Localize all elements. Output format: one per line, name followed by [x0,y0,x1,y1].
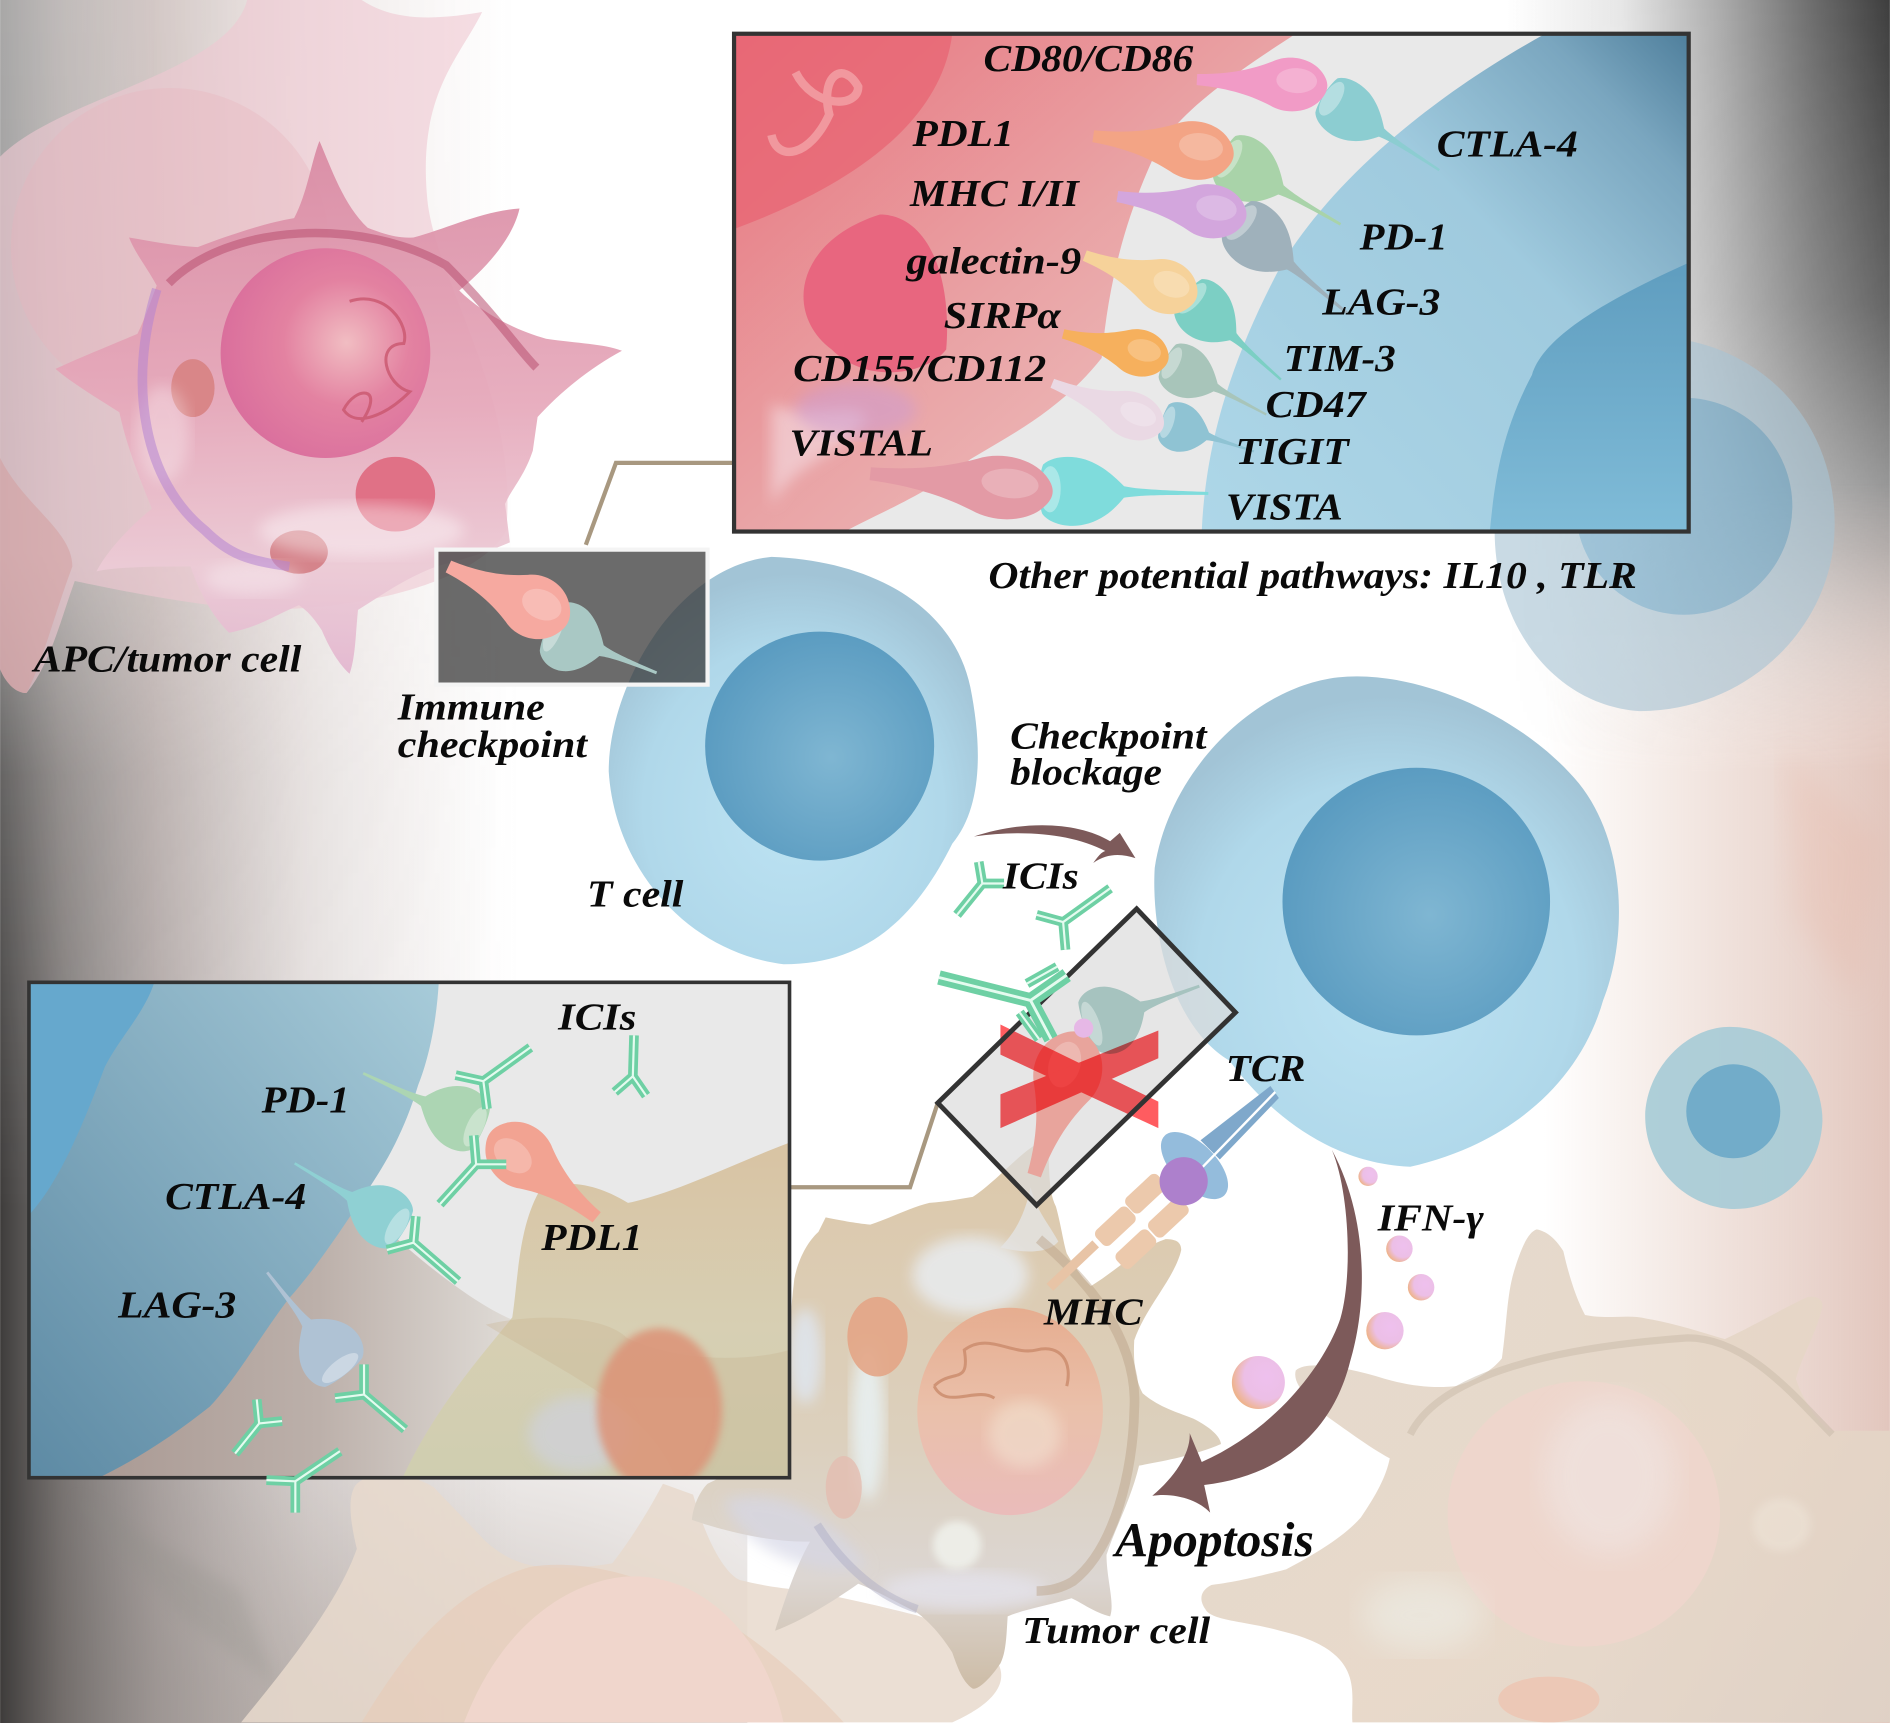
panel labels: VISTA [1226,486,1343,528]
labels: TCR, MHC, IFN, tumor, apoptosis: Apoptosis [1112,1514,1314,1567]
CTLA-4 [1315,78,1440,171]
blocked checkpoint box [938,909,1235,1205]
MHC I/II ligand [1116,184,1246,238]
small T cell, right [1645,1027,1822,1209]
panel labels: TIGIT [1235,431,1350,473]
PDL1 ligand [1092,121,1234,180]
pink APC region [734,34,1296,532]
panel labels [790,38,1578,528]
ligand [1002,1022,1113,1186]
arrow: apoptosis [1152,1150,1362,1513]
PD-1 [1213,135,1342,226]
panel labels: CTLA-4 [1437,124,1578,166]
panel labels: galectin-9 [905,241,1081,283]
CD47 [1158,344,1267,416]
antibodies: main [939,862,1110,1039]
panel labels: CD155/CD112 [793,348,1046,390]
label: ICIs main: ICIs [1002,855,1079,897]
galectin-9 ligand [1083,250,1198,314]
red cross [1000,1025,1158,1128]
labels: TCR, MHC, IFN, tumor, apoptosis: Tumor cell [1022,1610,1210,1652]
panel labels: CD47 [1266,384,1368,426]
main labels: T cell [587,873,684,915]
panel labels: CD80/CD86 [984,38,1194,80]
T cell [609,557,978,964]
panel labels: PDL1 [540,1217,642,1259]
blue cell region [1202,34,1689,532]
VISTAL ligand [870,456,1053,520]
blue cell region [29,982,439,1478]
PD-1 [362,1072,490,1152]
panel labels: ICIs [557,996,636,1038]
CD155/CD112 ligand [1050,379,1164,440]
faded tumor cell, bottom right [1201,1229,1890,1722]
main labels: APC/tumor cell [32,638,302,680]
labels: TCR, MHC, IFN, tumor, apoptosis: TCR [1226,1048,1305,1090]
PDL1 [485,1122,601,1222]
main labels: checkpoint [398,724,588,766]
inset: immune checkpoint [434,548,710,687]
main labels: Immune [397,687,545,729]
faded tumor cell, bottom centre [241,1474,1001,1722]
SIRP ligand [1062,329,1169,377]
panel: blockade by ICIs [29,982,790,1513]
T cell, activated [1154,676,1619,1167]
IFN-gamma particles [1232,1167,1434,1409]
brown background [102,1216,510,1476]
antibodies: panel [235,1035,646,1513]
main labels: blockage [1010,752,1162,794]
TIM-3 [1174,279,1282,380]
tumor cell [692,1139,1221,1689]
main labels: Checkpoint [1010,716,1208,758]
panel labels: VISTAL [790,423,933,465]
faded T cell, top right [1495,337,1835,711]
labels: TCR, MHC, IFN, tumor, apoptosis [1022,1048,1485,1652]
labels: TCR, MHC, IFN, tumor, apoptosis: MHC [1043,1292,1144,1334]
connector lines [586,463,938,1187]
panel labels: PD-1 [1359,217,1448,259]
panel labels: PD-1 [261,1080,350,1122]
CTLA-4 [279,1137,420,1255]
panel labels: PDL1 [911,113,1014,155]
panel: checkpoint pairs [734,34,1689,532]
panel labels: MHC I/II [909,173,1081,215]
panel labels: TIM-3 [1284,338,1396,380]
panel labels: CTLA-4 [165,1176,306,1218]
other pathways note: Other potential pathways: IL10 , TLR [988,555,1637,597]
LAG-3 [1222,201,1348,314]
APC / tumor cell [55,141,622,674]
TIGIT [1158,402,1254,452]
faded outer membrane of APC [0,0,508,693]
TCR / MHC complex [1050,1086,1279,1287]
LAG-3 [241,1252,373,1394]
panel labels: LAG-3 [1321,282,1440,324]
CD80/CD86 [1196,58,1328,112]
panel labels: SIRPα [944,295,1061,337]
labels: TCR, MHC, IFN, tumor, apoptosis: IFN-γ [1377,1198,1485,1240]
receptor [1073,954,1211,1060]
panel labels: LAG-3 [117,1284,236,1326]
tan tumor region [403,1143,790,1478]
main labels [32,638,1208,915]
VISTA [1039,456,1209,528]
arrow: checkpoint blockage [974,825,1135,863]
panel labels [117,996,642,1326]
